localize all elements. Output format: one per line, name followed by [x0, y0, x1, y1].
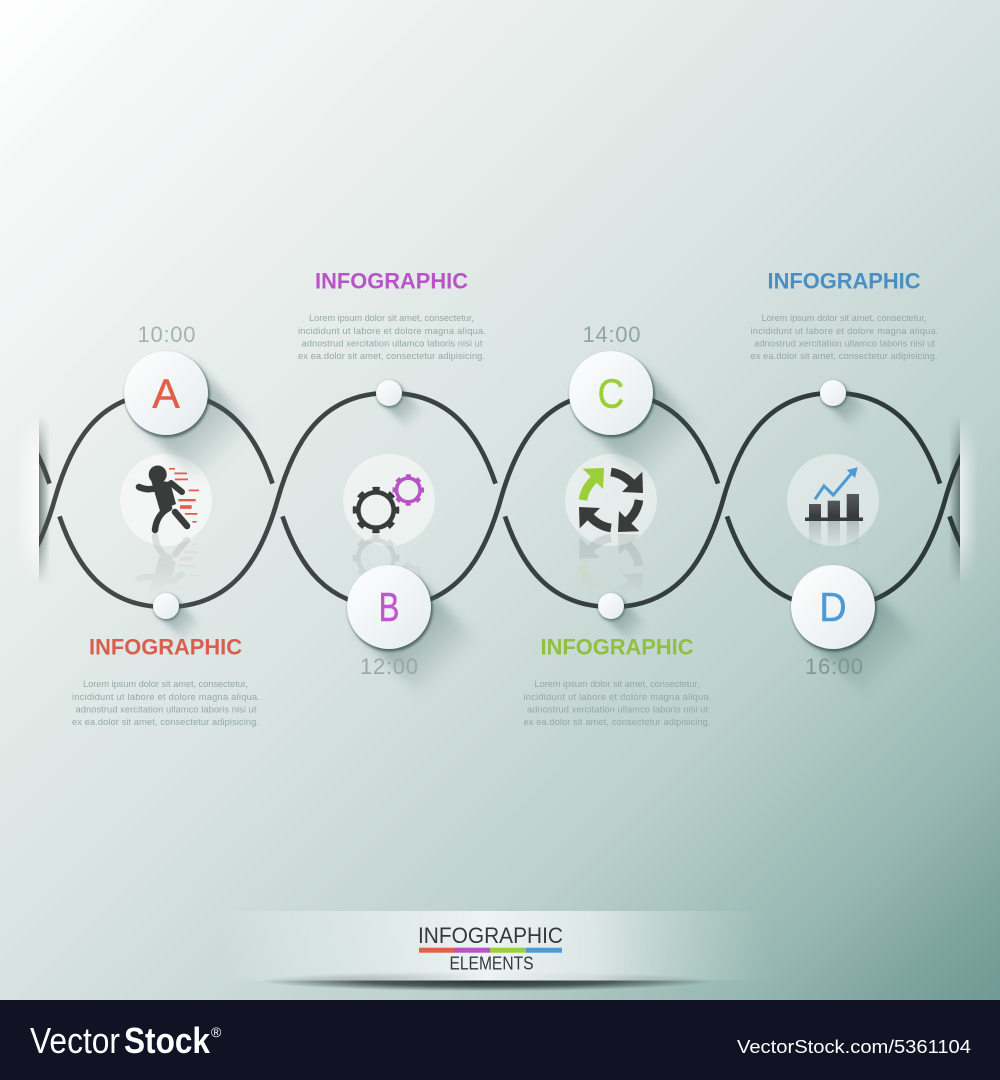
- body B: ex ea.dolor sit amet, consectetur adipisicing.: [298, 351, 485, 361]
- text block B: [298, 268, 486, 361]
- heading D: INFOGRAPHIC: [768, 268, 921, 294]
- knob B: B: [379, 584, 399, 630]
- knob D: [791, 565, 925, 699]
- body B: Lorem ipsum dolor sit amet, consectetur,: [309, 313, 474, 323]
- icon disc B: [343, 454, 435, 546]
- icon: cycle arrows: [579, 468, 643, 532]
- registered mark: ®: [211, 1024, 222, 1040]
- small node C: [598, 593, 648, 643]
- body D: adnostrud xercitation ullamco laboris nisi ut: [754, 338, 935, 348]
- body C: Lorem ipsum dolor sit amet, consectetur,: [534, 679, 700, 689]
- woven wave line: [0, 393, 1000, 607]
- body A: Lorem ipsum dolor sit amet, consectetur,: [83, 679, 248, 689]
- time 12:00: 12:00: [360, 654, 418, 679]
- banner title: INFOGRAPHIC: [418, 923, 563, 948]
- icon disc D: [787, 454, 879, 546]
- time 10:00: 10:00: [138, 322, 196, 347]
- knob C: [569, 351, 703, 485]
- text block D: [750, 268, 938, 361]
- left end panel: [26, 418, 50, 581]
- body A: incididunt ut labore et dolore magna aliqua.: [72, 692, 260, 702]
- right end panel: [950, 420, 975, 580]
- banner shadow: [262, 971, 712, 991]
- heading A: INFOGRAPHIC: [89, 634, 242, 660]
- body C: [524, 679, 712, 727]
- body D: incididunt ut labore et dolore magna aliqua.: [750, 326, 938, 336]
- icon: runner: [139, 466, 199, 530]
- banner subtitle: ELEMENTS: [450, 954, 534, 974]
- icon reflections: [136, 533, 643, 580]
- small node B: [376, 380, 426, 430]
- body D: ex ea.dolor sit amet, consectetur adipisicing.: [750, 351, 938, 361]
- icon disc A: [120, 454, 212, 546]
- bottom banner: [222, 911, 772, 991]
- knob C: C: [598, 372, 624, 417]
- body C: adnostrud xercitation ullamco laboris nisi ut: [527, 704, 708, 714]
- icon disc C: [565, 454, 657, 546]
- footer logo: Stock: [124, 1020, 211, 1061]
- knob D: D: [819, 585, 847, 630]
- small node D: [820, 380, 870, 430]
- knob A: [124, 351, 258, 485]
- body B: [298, 313, 486, 361]
- body D: [750, 313, 938, 361]
- time 14:00: 14:00: [582, 322, 640, 347]
- time 16:00: 16:00: [805, 654, 863, 679]
- footer logo: Vector: [30, 1020, 120, 1061]
- body B: incididunt ut labore et dolore magna aliqua.: [298, 326, 486, 336]
- knob A: A: [152, 370, 180, 416]
- body B: adnostrud xercitation ullamco laboris nisi ut: [302, 338, 483, 348]
- colour bar: [419, 948, 562, 953]
- body D: Lorem ipsum dolor sit amet, consectetur,: [762, 313, 926, 323]
- footer bar: [0, 1000, 1000, 1080]
- icon: rising chart: [805, 467, 863, 521]
- chart reflection: [809, 521, 859, 548]
- infographic artwork: [26, 273, 975, 1054]
- banner strip: [222, 911, 772, 980]
- knob B: [347, 565, 481, 699]
- body A: adnostrud xercitation ullamco laboris nisi ut: [76, 704, 257, 714]
- body C: incididunt ut labore et dolore magna aliqua.: [524, 692, 712, 702]
- text block C: [524, 634, 712, 727]
- body A: ex ea.dolor sit amet, consectetur adipisicing.: [72, 717, 259, 727]
- heading B: INFOGRAPHIC: [315, 268, 468, 294]
- small node A: [153, 593, 203, 643]
- icon: gears: [355, 476, 422, 531]
- body A: [72, 679, 260, 727]
- footer url: VectorStock.com/5361104: [737, 1036, 971, 1057]
- heading C: INFOGRAPHIC: [540, 634, 694, 660]
- body C: ex ea.dolor sit amet, consectetur adipisicing.: [524, 717, 710, 727]
- footer logo: [30, 1020, 211, 1061]
- text block A: [72, 634, 260, 727]
